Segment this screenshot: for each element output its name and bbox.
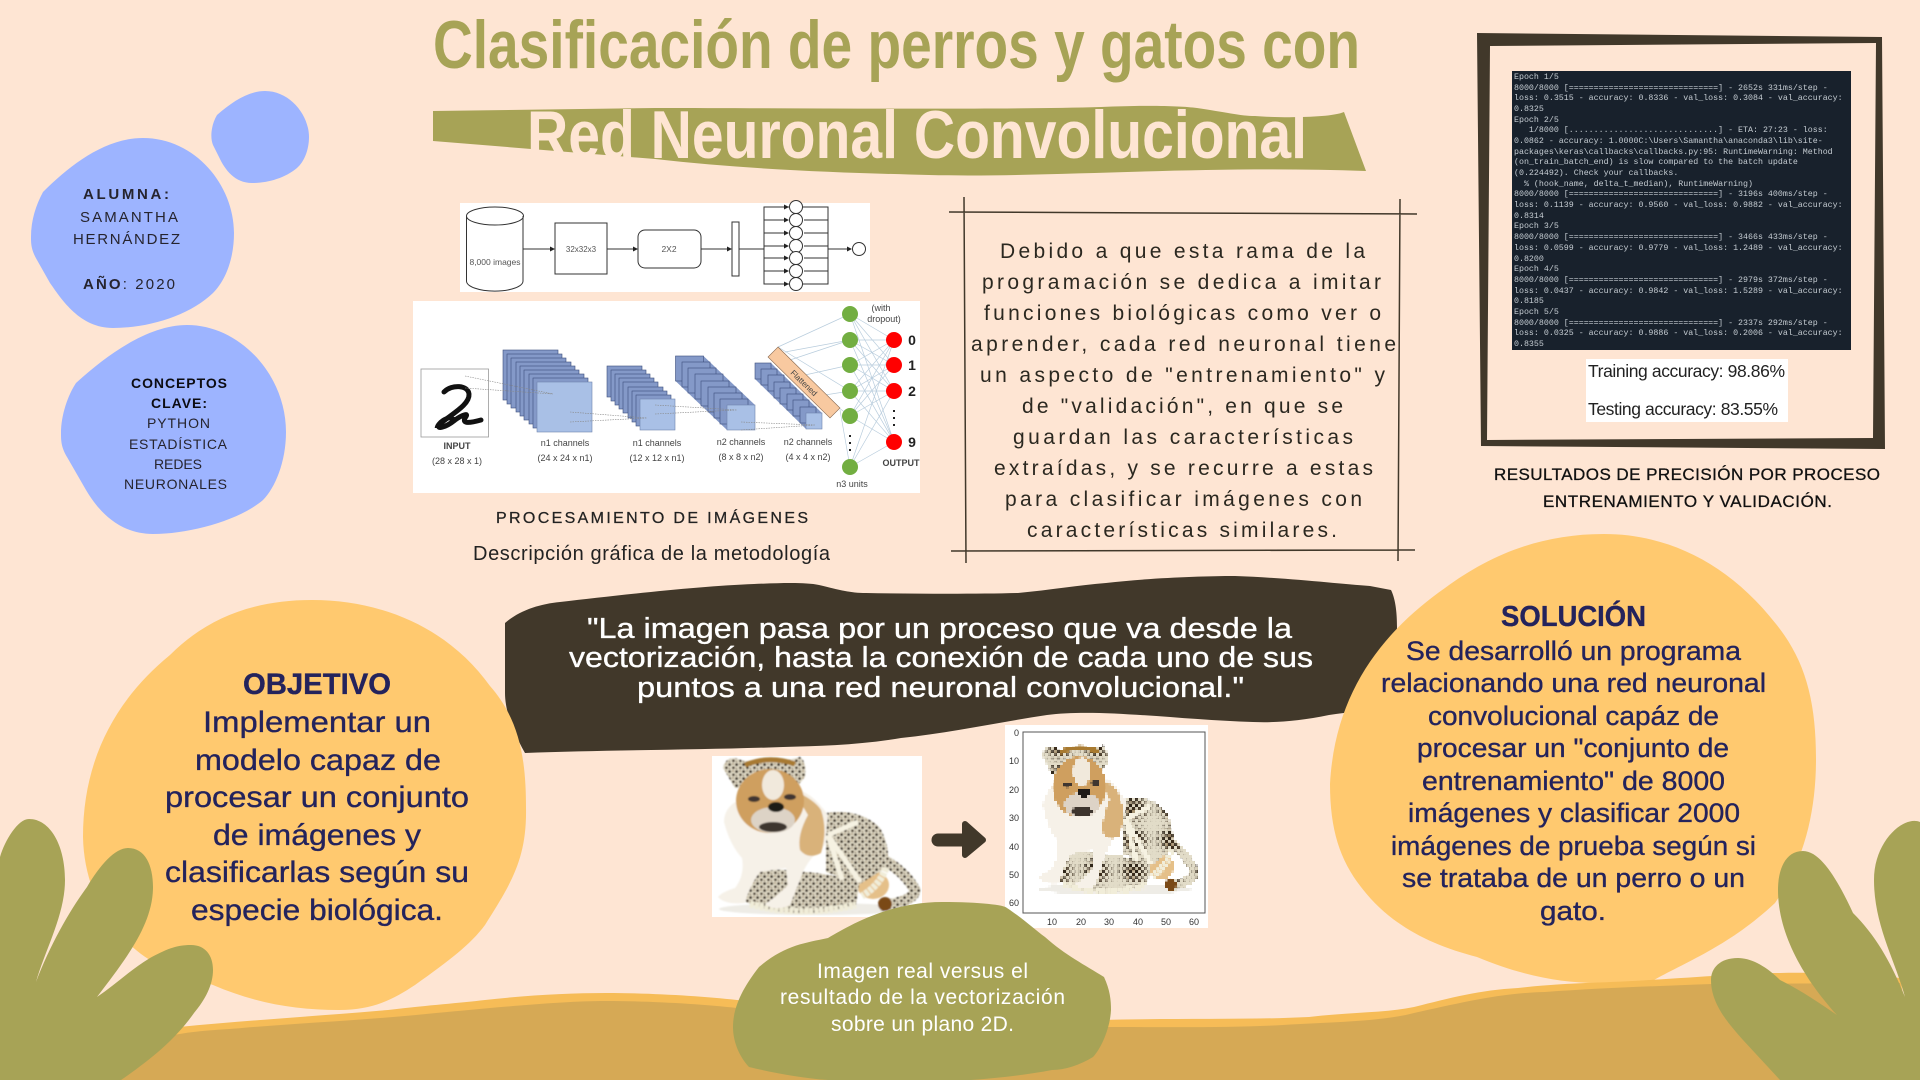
diagram caption heading: PROCESAMIENTO DE IMÁGENES — [496, 508, 808, 527]
objetivo text: especie biológica. — [191, 894, 443, 927]
terminal output: packages\keras\callbacks\callbacks.py:95: RuntimeWarning: Method — [1514, 147, 1833, 157]
terminal output: loss: 0.0437 - accuracy: 0.9842 - val_loss: 1.5289 - val_accuracy: — [1514, 286, 1843, 296]
terminal output: Epoch 5/5 — [1514, 307, 1559, 317]
plot axis labels: 40 — [1009, 842, 1019, 852]
conceptos text: CONCEPTOS — [131, 375, 227, 391]
accuracy box — [1586, 359, 1788, 422]
solucion text: entrenamiento" de 8000 — [1422, 766, 1725, 796]
quote text — [569, 613, 1313, 704]
terminal output — [0, 0, 1851, 350]
caption blob — [733, 902, 1111, 1080]
diagram: cnn flow — [460, 200, 870, 292]
diagram labels: (12 x 12 x n1) — [629, 453, 685, 463]
objetivo text: clasificarlas según su — [165, 856, 469, 889]
diagram: convolutional network: 1 — [908, 357, 916, 373]
terminal output: 8000/8000 [==============================] - 3466s 433ms/step - — [1514, 232, 1828, 242]
panel: alumna — [31, 138, 234, 328]
quote banner — [505, 576, 1397, 753]
plot axis labels: 20 — [1009, 785, 1019, 795]
solucion text: imágenes y clasificar 2000 — [1408, 798, 1740, 828]
results frame — [1477, 33, 1885, 449]
objetivo text: OBJETIVO — [243, 668, 391, 701]
solucion text: procesar un "conjunto de — [1417, 733, 1729, 763]
terminal output: 8000/8000 [==============================] - 2652s 331ms/step - — [1514, 83, 1828, 93]
diagram: convolutional network: 2 — [908, 383, 916, 399]
text block: explanation: características similares. — [1027, 519, 1337, 542]
quote text: vectorización, hasta la conexión de cada uno de sus — [569, 642, 1313, 674]
solucion text: relacionando una red neuronal — [1381, 668, 1766, 698]
diagram labels: n3 units — [836, 479, 868, 489]
alumna text — [73, 186, 180, 293]
plot axis labels: 40 — [1133, 917, 1143, 927]
decorative small blue blob — [211, 91, 309, 183]
terminal output: (on_train_batch_end) is slow compared to the batch update — [1514, 157, 1798, 167]
text block: explanation: Debido a que esta rama de la — [1000, 240, 1365, 263]
diagram labels: (28 x 28 x 1) — [432, 456, 482, 466]
plot axis labels: 30 — [1009, 813, 1019, 823]
conceptos text: PYTHON — [147, 415, 210, 431]
leaves right — [1711, 821, 1920, 1080]
banner text: Red Neuronal Convolucional — [527, 97, 1307, 173]
alumna text: ALUMNA: — [83, 186, 169, 203]
text block: explanation: funciones biológicas como ver o — [984, 302, 1381, 325]
text block: explanation — [971, 240, 1396, 542]
terminal output: 8000/8000 [==============================] - 2337s 292ms/step - — [1514, 318, 1828, 328]
photo: real dog — [712, 756, 922, 917]
objetivo text: de imágenes y — [213, 819, 421, 852]
convolution stacks — [465, 350, 822, 432]
conceptos text: CLAVE: — [151, 395, 207, 411]
panel: conceptos clave — [61, 325, 286, 534]
solucion text: se trataba de un perro o un — [1402, 863, 1745, 893]
terminal output: 1/8000 [..............................] - ETA: 27:23 - loss: — [1514, 125, 1828, 135]
red neurons — [886, 332, 902, 450]
terminal output: Epoch 2/5 — [1514, 115, 1559, 125]
text block: explanation: extraídas, y se recurre a estas — [994, 457, 1373, 480]
diagram labels: INPUT — [444, 441, 471, 451]
text box frame — [949, 197, 1417, 563]
caption text: sobre un plano 2D. — [831, 1013, 1014, 1036]
conceptos text: ESTADÍSTICA — [129, 436, 228, 452]
diagram labels: n2 channels — [784, 437, 833, 447]
solucion text: SOLUCIÓN — [1501, 599, 1646, 633]
text block: explanation: un aspecto de "entrenamiento" y — [980, 364, 1386, 387]
diagram labels: n1 channels — [633, 438, 682, 448]
diagram: convolutional network — [413, 301, 920, 493]
diagram: cnn flow: 2X2 — [661, 244, 677, 254]
arrow — [938, 824, 983, 855]
diagram labels — [432, 303, 920, 489]
plot axis labels: 60 — [1009, 898, 1019, 908]
flattened layer: Flattened — [789, 368, 819, 398]
diagram labels: (with — [871, 303, 891, 313]
objetivo text: modelo capaz de — [195, 744, 441, 777]
panel: solucion blob — [1330, 534, 1816, 984]
text block: explanation: de "validación", en que se — [1022, 395, 1343, 418]
diagram: cnn flow: 32x32x3 — [566, 245, 597, 254]
pixelated dog — [1024, 734, 1202, 900]
caption text: resultado de la vectorización — [780, 986, 1065, 1009]
diagram: convolutional network: 9 — [908, 434, 916, 450]
accuracy box: Testing accuracy: 83.55% — [1588, 399, 1778, 419]
solucion text: convolucional capáz de — [1428, 701, 1719, 731]
text block: explanation: guardan las características — [1013, 426, 1353, 449]
diagram labels: (4 x 4 x n2) — [785, 452, 831, 462]
arrow shaft — [938, 834, 965, 846]
quote text: puntos a una red neuronal convolucional." — [637, 672, 1244, 704]
caption text: Imagen real versus el — [817, 960, 1028, 983]
diagram labels: (24 x 24 x n1) — [537, 453, 593, 463]
diagram labels: n2 channels — [717, 437, 766, 447]
diagram labels: dropout) — [867, 314, 901, 324]
terminal output: Epoch 1/5 — [1514, 72, 1559, 82]
plot axis labels: 30 — [1104, 917, 1114, 927]
quote text: "La imagen pasa por un proceso que va desde la — [587, 613, 1293, 645]
terminal output: loss: 0.3515 - accuracy: 0.8336 - val_loss: 0.3084 - val_accuracy: — [1514, 93, 1843, 103]
solucion text — [1381, 599, 1766, 926]
title line: Clasificación de perros y gatos con — [433, 7, 1360, 83]
conceptos text — [124, 375, 228, 492]
terminal output: 0.0862 - accuracy: 1.0000C:\Users\Samantha\anaconda3\lib\site- — [1514, 136, 1823, 146]
plot axis labels: 10 — [1009, 756, 1019, 766]
objetivo text: procesar un conjunto — [165, 781, 469, 814]
alumna text: AÑO: 2020 — [83, 275, 175, 293]
plot: vectorized dog — [1005, 725, 1208, 928]
text block: explanation: programación se dedica a imitar — [982, 271, 1381, 294]
terminal output: Epoch 4/5 — [1514, 264, 1559, 274]
results caption — [1494, 465, 1880, 511]
terminal output: 0.8200 — [1514, 255, 1544, 264]
results caption: ENTRENAMIENTO Y VALIDACIÓN. — [1543, 492, 1832, 511]
plot axis labels — [1009, 728, 1199, 927]
terminal output: 8000/8000 [==============================] - 3196s 400ms/step - — [1514, 189, 1828, 199]
terminal output: 0.8325 — [1514, 105, 1544, 114]
terminal output: loss: 0.1139 - accuracy: 0.9560 - val_loss: 0.9882 - val_accuracy: — [1514, 200, 1843, 210]
diagram labels: OUTPUT — [882, 458, 920, 468]
ground — [90, 973, 1920, 1080]
text block: explanation: para clasificar imágenes con — [1005, 488, 1362, 511]
terminal output: 0.8314 — [1514, 212, 1544, 221]
terminal output: loss: 0.0599 - accuracy: 0.9779 - val_loss: 1.2489 - val_accuracy: — [1514, 243, 1843, 253]
diagram caption: Descripción gráfica de la metodología — [473, 543, 831, 565]
solucion text: gato. — [1540, 896, 1606, 926]
network connections — [778, 314, 894, 467]
terminal output: % (hook_name, delta_t_median), RuntimeWarning) — [1514, 179, 1753, 189]
plot axis labels: 10 — [1047, 917, 1057, 927]
leaves left — [0, 819, 213, 1080]
alumna text: HERNÁNDEZ — [73, 231, 180, 248]
terminal output: 0.8355 — [1514, 340, 1544, 349]
objetivo text: Implementar un — [203, 706, 431, 739]
terminal output: loss: 0.0325 - accuracy: 0.9886 - val_loss: 0.2006 - val_accuracy: — [1514, 328, 1843, 338]
input digit — [421, 369, 488, 437]
diagram: convolutional network: 0 — [908, 332, 916, 348]
plot axis labels: 50 — [1161, 917, 1171, 927]
plot axis labels: 20 — [1076, 917, 1086, 927]
green neurons — [842, 306, 858, 475]
accuracy box: Training accuracy: 98.86% — [1588, 361, 1785, 381]
title banner — [433, 97, 1366, 175]
diagram labels: n1 channels — [541, 438, 590, 448]
conceptos text: NEURONALES — [124, 476, 227, 492]
results caption: RESULTADOS DE PRECISIÓN POR PROCESO — [1494, 465, 1880, 484]
panel: objetivo blob — [83, 600, 526, 1010]
plot axis labels: 60 — [1189, 917, 1199, 927]
text block: explanation: aprender, cada red neuronal tiene — [971, 333, 1396, 356]
terminal output: (0.224492). Check your callbacks. — [1514, 168, 1678, 178]
terminal output: 0.8185 — [1514, 297, 1544, 306]
plot axis labels: 0 — [1014, 728, 1019, 738]
caption text — [780, 960, 1065, 1036]
solucion text: imágenes de prueba según si — [1391, 831, 1756, 861]
objetivo text — [165, 668, 469, 927]
terminal output: Epoch 3/5 — [1514, 221, 1559, 231]
solucion text: Se desarrolló un programa — [1406, 636, 1742, 666]
terminal output: 8000/8000 [==============================] - 2979s 372ms/step - — [1514, 275, 1828, 285]
diagram labels: (8 x 8 x n2) — [718, 452, 764, 462]
flattened layer — [768, 347, 840, 418]
diagram: cnn flow: 8,000 images — [469, 257, 521, 267]
conceptos text: REDES — [154, 456, 202, 472]
plot axis labels: 50 — [1009, 870, 1019, 880]
alumna text: SAMANTHA — [80, 209, 178, 226]
